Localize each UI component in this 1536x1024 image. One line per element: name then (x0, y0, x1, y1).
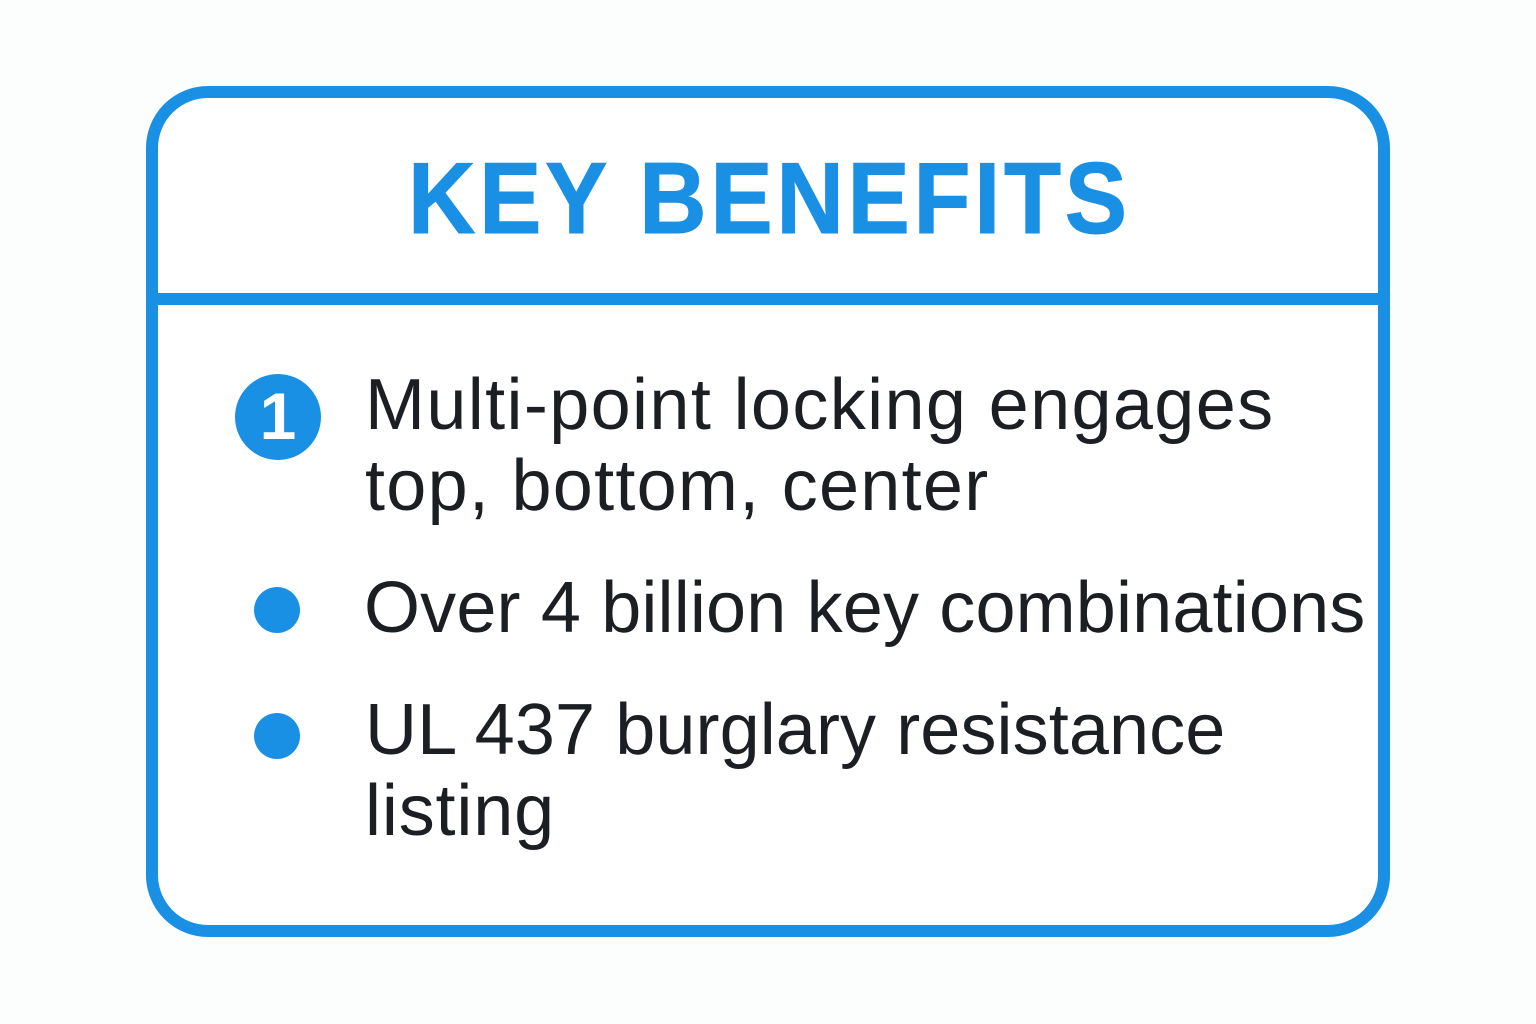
text: multi-point locking: top, bottom, center (365, 446, 989, 526)
text: multi-point locking (365, 365, 1274, 526)
heading: KEY BENEFITS: KEY BENEFITS (408, 143, 1131, 255)
text: UL 437 listing: UL 437 burglary resistance (365, 690, 1225, 770)
header divider (152, 293, 1384, 305)
text: key combinations: Over 4 billion key combinations (364, 568, 1365, 648)
icon: bullet 3 (254, 713, 300, 759)
text: UL 437 listing (365, 690, 1225, 851)
icon: numbered bullet 1 (235, 374, 321, 460)
text: multi-point locking: Multi-point locking engages (365, 365, 1274, 445)
icon: numbered bullet 1: 1 (260, 379, 296, 453)
icon: bullet 2 (254, 587, 300, 633)
text: UL 437 listing: listing (365, 771, 555, 851)
panel: key benefits card (146, 86, 1390, 937)
